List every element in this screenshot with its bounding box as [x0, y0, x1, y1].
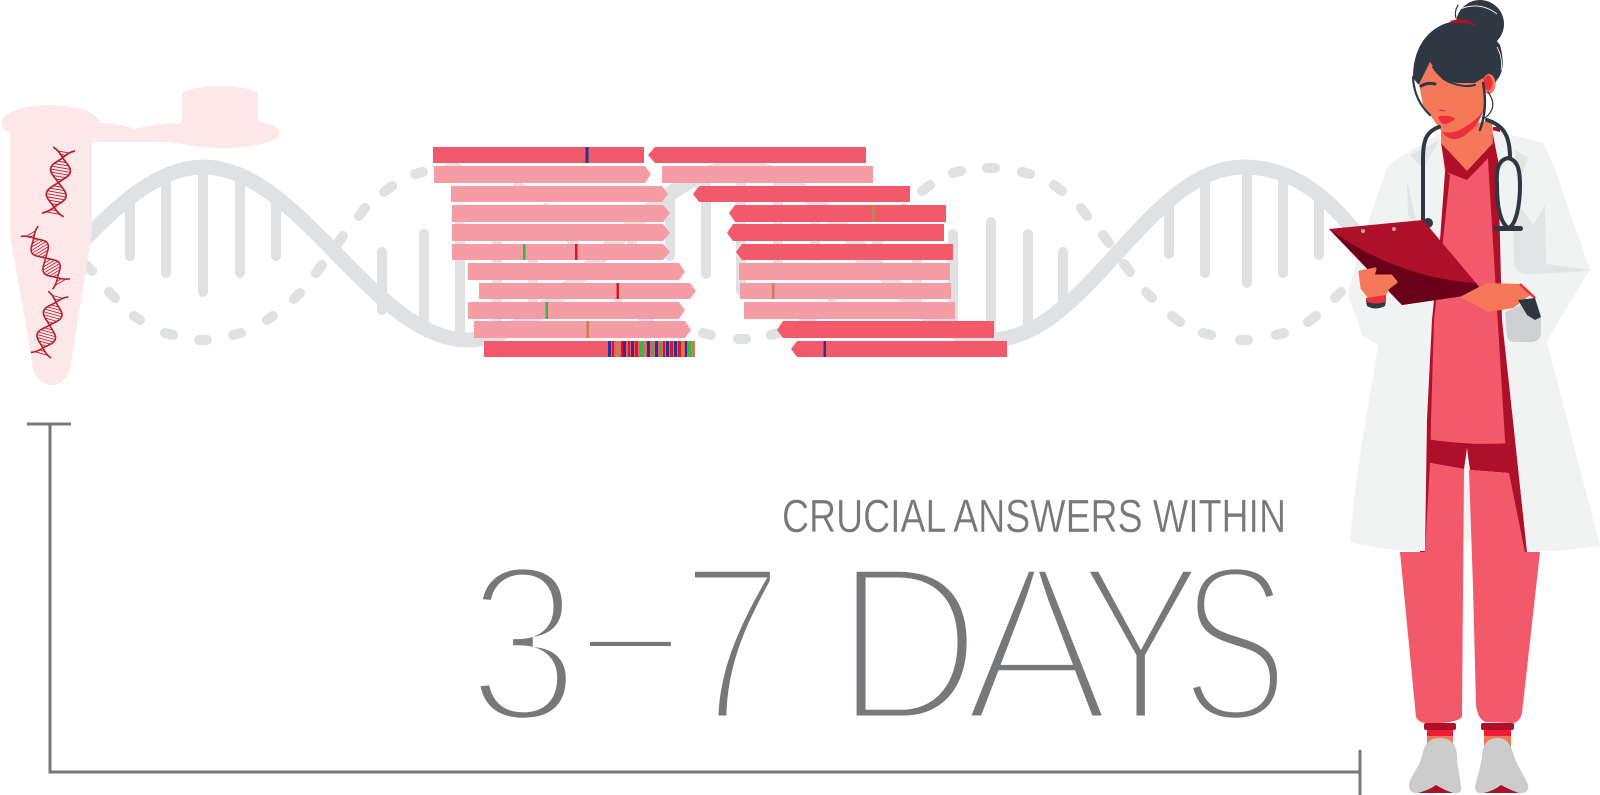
waistband [1420, 439, 1525, 552]
face [1419, 62, 1484, 136]
big heading: – [586, 497, 674, 749]
hair highlights [1460, 6, 1502, 70]
stethoscope [1423, 120, 1523, 231]
big heading: 3 [467, 517, 580, 769]
pants right leg [1469, 470, 1540, 723]
hair details [1413, 5, 1493, 130]
scrub neckline [1441, 143, 1493, 180]
variant stripes [608, 341, 695, 357]
scrub top [1426, 150, 1513, 445]
shoe left [1409, 738, 1461, 793]
hair tie [1450, 19, 1477, 26]
helix rungs [130, 167, 1319, 338]
left hand [1360, 269, 1396, 308]
coat shadows [1407, 140, 1590, 274]
shoe right [1475, 738, 1528, 793]
dna helix background [0, 167, 1370, 340]
big heading [467, 497, 1288, 769]
helix front strand [0, 167, 1370, 340]
big heading: A [963, 517, 1110, 769]
big heading: D [835, 517, 981, 769]
nose [1438, 110, 1446, 111]
big heading: Y [1077, 517, 1205, 769]
dna strand in tube 3 [31, 291, 68, 358]
pants left leg [1400, 463, 1464, 723]
sample tube [1, 86, 280, 385]
cuffs and socks [1424, 723, 1514, 748]
big heading: 7 [681, 517, 784, 769]
sequencing reads right column [648, 147, 1007, 357]
timeline bracket [27, 424, 1360, 795]
coat left panel [1348, 133, 1445, 551]
tube body [10, 130, 92, 385]
coat right panel [1492, 130, 1600, 551]
dna strand in tube 1 [42, 147, 75, 217]
clipboard [1329, 220, 1484, 305]
big heading: S [1181, 517, 1288, 769]
scrub dark trim [1425, 127, 1527, 552]
doctor illustration [1329, 0, 1600, 793]
lips [1438, 116, 1455, 124]
helix back strand dashes [86, 168, 1341, 340]
right hand [1462, 284, 1541, 320]
coat back [1430, 420, 1510, 541]
ear [1482, 74, 1496, 94]
hair back [1413, 0, 1504, 92]
tube lid and strap [90, 86, 280, 148]
subheading: CRUCIAL ANSWERS WITHIN [782, 490, 1286, 542]
chin shadow [1442, 111, 1483, 139]
dna strand in tube 2 [21, 226, 70, 289]
neck and chest [1441, 120, 1493, 171]
sequencing reads left column [433, 147, 696, 357]
